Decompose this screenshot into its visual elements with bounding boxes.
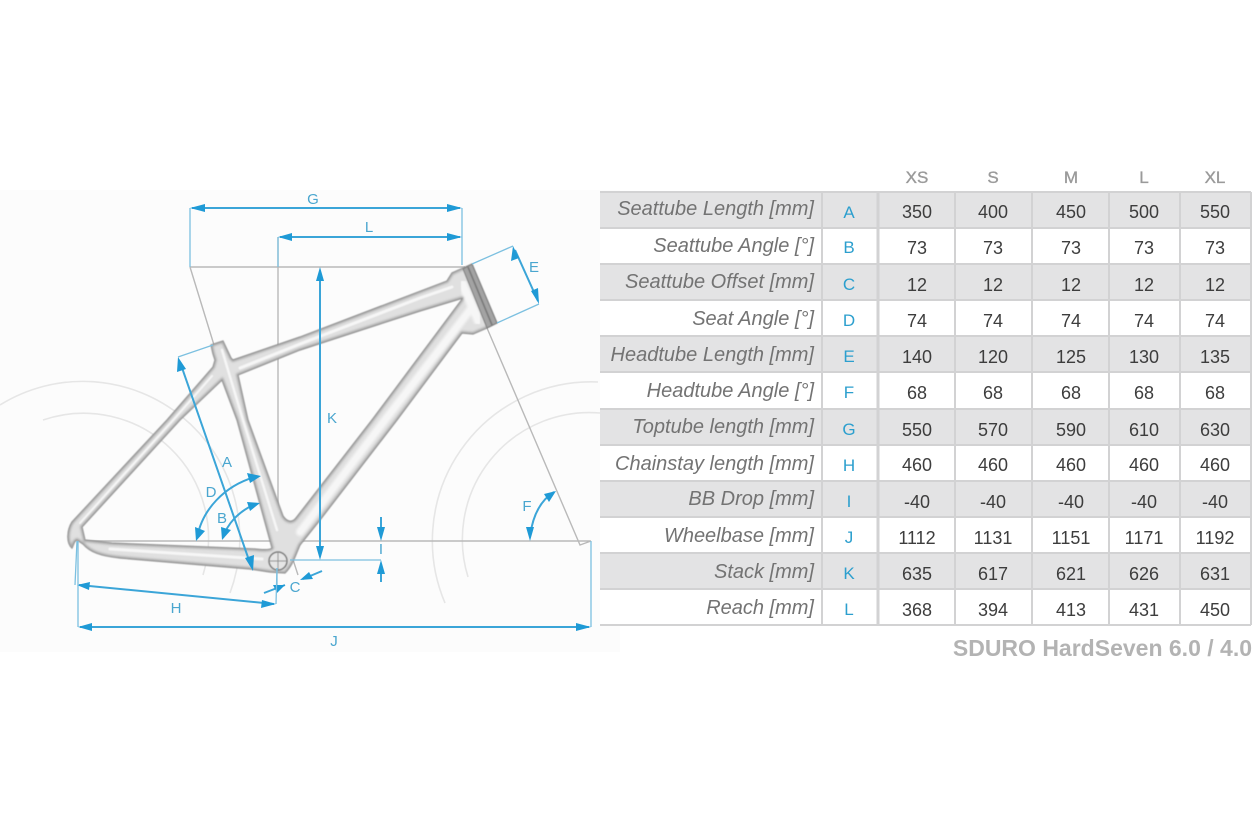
row: Reach: L — [844, 600, 854, 619]
row: Reach: Reach [mm] — [706, 597, 814, 619]
row: Wheelbase: Wheelbase [mm] — [664, 525, 814, 547]
row: Chainstay length — [615, 453, 1230, 475]
row: Seat Angle — [692, 308, 1225, 331]
row: BB Drop: -40 — [980, 492, 1006, 512]
dimension H — [75, 541, 277, 617]
dimension H: H — [171, 600, 181, 617]
size header: S — [987, 168, 999, 187]
row: Seattube Angle: 73 — [1134, 238, 1154, 258]
dimension I — [290, 517, 385, 582]
row: Toptube length: 550 — [902, 420, 932, 440]
row: Reach: 431 — [1129, 600, 1159, 620]
row: Seat Angle: Seat Angle [°] — [692, 308, 814, 330]
row: BB Drop: -40 — [1131, 492, 1157, 512]
row: BB Drop: -40 — [1058, 492, 1084, 512]
angle D — [195, 473, 261, 541]
row: Headtube Angle: 68 — [1205, 383, 1225, 403]
row: Seattube Offset: 12 — [907, 275, 927, 295]
row: Stack — [600, 553, 1251, 589]
row: Stack: 631 — [1200, 564, 1230, 584]
row: Stack: 635 — [902, 564, 932, 584]
head tube — [463, 264, 497, 328]
row: Stack: 621 — [1056, 564, 1086, 584]
dimension A: A — [222, 454, 232, 471]
dimension J: J — [330, 633, 338, 650]
row: Headtube Angle: 68 — [1061, 383, 1081, 403]
dimension E — [472, 246, 539, 323]
row: BB Drop: I — [847, 492, 851, 511]
tube highlights — [240, 287, 452, 368]
row: Seat Angle: 74 — [907, 311, 927, 331]
row: Stack: 626 — [1129, 564, 1159, 584]
dimension L — [278, 219, 462, 267]
angle F: F — [522, 498, 532, 515]
angle B — [217, 502, 260, 540]
row: Wheelbase: 1171 — [1125, 528, 1163, 548]
row: Seattube Offset: Seattube Offset [mm] — [625, 271, 814, 293]
row: Headtube Length: 140 — [902, 347, 932, 367]
row: Seattube Length — [600, 192, 1251, 228]
row: Wheelbase: 1131 — [974, 528, 1012, 548]
row: Headtube Angle — [647, 380, 1225, 403]
angle D: D — [206, 484, 217, 501]
row: BB Drop: -40 — [1202, 492, 1228, 512]
row: Seat Angle: 74 — [1061, 311, 1081, 331]
row: Reach: 450 — [1200, 600, 1230, 620]
row: Chainstay length: H — [843, 456, 855, 475]
size header: XL — [1205, 168, 1225, 187]
row: Reach — [706, 597, 1230, 620]
row: BB Drop: -40 — [904, 492, 930, 512]
row: BB Drop — [600, 481, 1251, 517]
row: Reach: 394 — [978, 600, 1008, 620]
row: Seattube Length: 350 — [902, 202, 932, 222]
row: Chainstay length: 460 — [1056, 455, 1086, 475]
row: Toptube length — [600, 409, 1251, 445]
dimension G — [190, 191, 462, 267]
dimension A — [177, 345, 254, 571]
dimension K: K — [327, 410, 337, 427]
row: Seattube Length: 400 — [978, 202, 1008, 222]
row: Wheelbase: 1151 — [1052, 528, 1090, 548]
row: Toptube length: G — [842, 420, 856, 439]
bottom bracket — [269, 552, 287, 570]
row: Chainstay length: 460 — [1200, 455, 1230, 475]
row: Seat Angle: 74 — [983, 311, 1003, 331]
row: Seattube Angle: B — [843, 238, 855, 257]
row: Reach: 413 — [1056, 600, 1086, 620]
row: Wheelbase: J — [845, 528, 853, 547]
reference lines — [83, 237, 591, 575]
row: Headtube Length: E — [843, 347, 855, 366]
row: Seattube Length: 550 — [1200, 202, 1230, 222]
size header — [906, 168, 1225, 187]
row: Seattube Length: 450 — [1056, 202, 1086, 222]
row: Toptube length: 590 — [1056, 420, 1086, 440]
size header: M — [1064, 168, 1078, 187]
row: Headtube Angle: 68 — [1134, 383, 1154, 403]
dimension L: L — [365, 219, 373, 236]
row: Toptube length: Toptube length [mm] — [632, 416, 814, 438]
geometry table — [600, 192, 1251, 625]
dimension G: G — [307, 191, 319, 208]
row: Seat Angle: D — [843, 311, 855, 330]
row: Seattube Offset: 12 — [1205, 275, 1225, 295]
row: Chainstay length: 460 — [1129, 455, 1159, 475]
size header: L — [1139, 168, 1149, 187]
wheel arcs — [0, 381, 600, 603]
dimension J — [78, 541, 591, 650]
row: Seattube Offset: 12 — [1134, 275, 1154, 295]
row: Seattube Offset: 12 — [1061, 275, 1081, 295]
row: Wheelbase: 1192 — [1196, 528, 1234, 548]
row: Seattube Angle: 73 — [1205, 238, 1225, 258]
row: Seattube Length: Seattube Length [mm] — [617, 198, 814, 220]
row: Wheelbase: 1112 — [898, 528, 936, 548]
row: Headtube Length — [600, 336, 1251, 372]
row: Seattube Offset: 12 — [983, 275, 1003, 295]
title: model name: SDURO HardSeven 6.0 / 4.0 — [953, 635, 1252, 661]
dimension E: E — [529, 259, 539, 276]
row: Chainstay length: 460 — [902, 455, 932, 475]
dimension C — [264, 568, 322, 596]
row: Toptube length: 630 — [1200, 420, 1230, 440]
row: Toptube length: 610 — [1129, 420, 1159, 440]
dimension I: I — [379, 541, 383, 558]
row: Seattube Angle: 73 — [983, 238, 1003, 258]
row: Seattube Length: 500 — [1129, 202, 1159, 222]
size header: XS — [906, 168, 928, 187]
row: Seat Angle: 74 — [1205, 311, 1225, 331]
dimension K — [316, 267, 337, 560]
tube edge shading — [68, 264, 497, 573]
row: BB Drop: BB Drop [mm] — [688, 488, 814, 510]
row: Wheelbase — [664, 525, 1234, 548]
row: Seattube Length: A — [843, 203, 855, 222]
row: Seattube Angle: 73 — [1061, 238, 1081, 258]
row: Seattube Angle — [653, 235, 1225, 258]
row: Headtube Length: 125 — [1056, 347, 1086, 367]
row: Seattube Angle: 73 — [907, 238, 927, 258]
row: Headtube Length: 130 — [1129, 347, 1159, 367]
row: Seattube Offset: C — [843, 275, 855, 294]
row: Headtube Angle: F — [844, 383, 854, 402]
row: Headtube Length: 120 — [978, 347, 1008, 367]
row: Seattube Offset — [600, 264, 1251, 300]
bike frame — [68, 264, 497, 573]
row: Headtube Angle: Headtube Angle [°] — [647, 380, 814, 402]
row: Headtube Length: Headtube Length [mm] — [611, 344, 814, 366]
panel: frame geometry diagram — [0, 190, 620, 652]
dimension C: C — [290, 579, 301, 596]
row: Stack: Stack [mm] — [714, 561, 814, 583]
row: Seat Angle: 74 — [1134, 311, 1154, 331]
row: Toptube length: 570 — [978, 420, 1008, 440]
angle B: B — [217, 510, 227, 527]
row: Stack: K — [843, 564, 855, 583]
row: Reach: 368 — [902, 600, 932, 620]
row: Headtube Angle: 68 — [907, 383, 927, 403]
row: Chainstay length: 460 — [978, 455, 1008, 475]
angle F — [522, 491, 556, 541]
row: Stack: 617 — [978, 564, 1008, 584]
row: Chainstay length: Chainstay length [mm] — [615, 453, 814, 475]
row: Headtube Angle: 68 — [983, 383, 1003, 403]
row: Seattube Angle: Seattube Angle [°] — [653, 235, 814, 257]
row: Headtube Length: 135 — [1200, 347, 1230, 367]
